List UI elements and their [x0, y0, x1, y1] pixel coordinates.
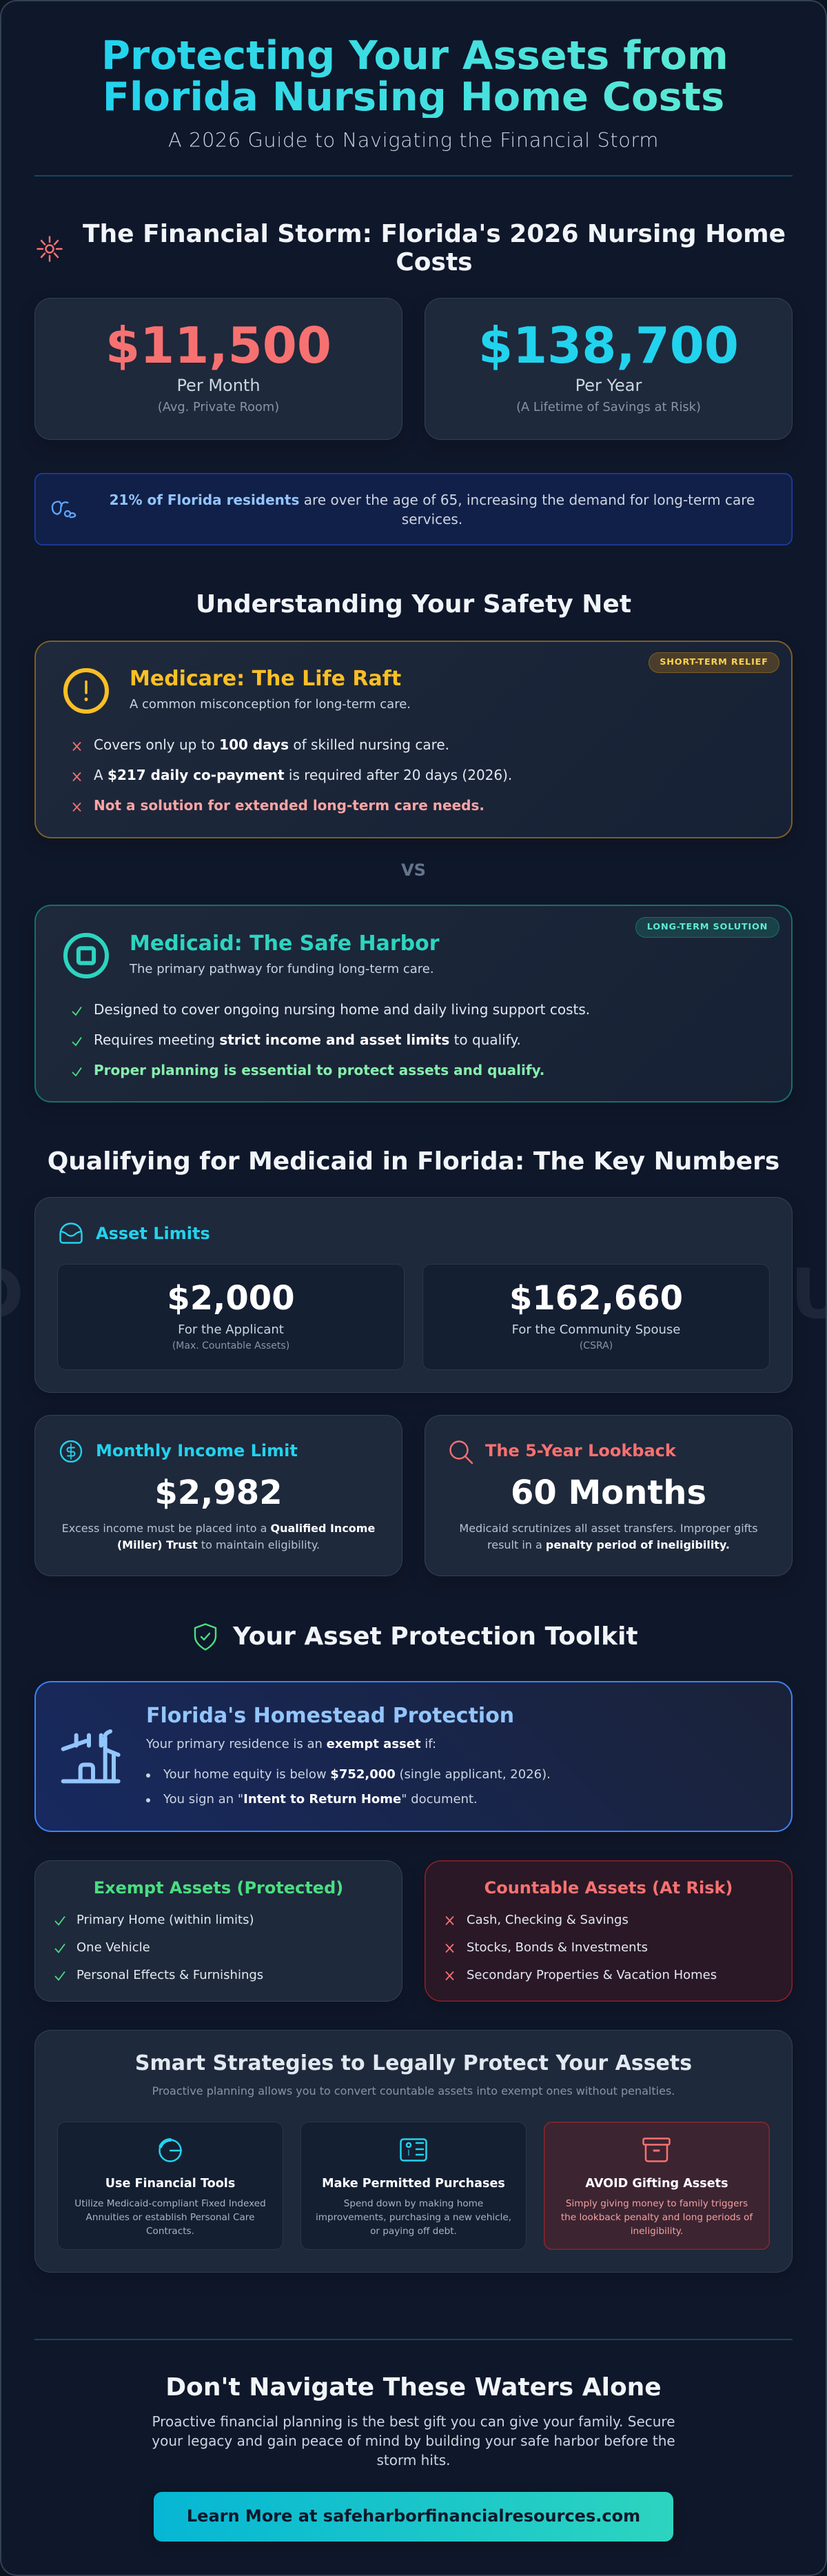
homestead intro: Your primary residence is an exempt asset if:: [146, 1737, 436, 1751]
callout: florida residents: [34, 473, 793, 545]
panel: asset limits: [34, 1197, 793, 1393]
lookback number: 60 Months: [511, 1473, 706, 1512]
icon: homestead: [61, 1729, 121, 1783]
asset limits heading: Asset Limits: [96, 1224, 210, 1243]
medicare subtitle: A common misconception for long-term care.: [130, 697, 411, 712]
list item: Not a solution for extended long-term care needs.: [94, 797, 484, 814]
stat card: per month: (Avg. Private Room): [158, 400, 279, 414]
list item: Personal Effects & Furnishings: [76, 1968, 263, 1982]
icon: magnifier: [449, 1440, 473, 1464]
exempt heading: Exempt Assets (Protected): [94, 1878, 343, 1898]
panel: countable assets: [425, 1860, 793, 2002]
icon: archive: [642, 2137, 671, 2162]
strategy: avoid gifting: the lookback penalty and long periods of: [561, 2212, 753, 2223]
stat card: per month: Per Month: [176, 376, 261, 395]
list item: Proper planning is essential to protect assets and qualify.: [94, 1062, 544, 1078]
heading: understanding your safety net: Understanding Your Safety Net: [196, 590, 631, 618]
panel: medicaid: [34, 905, 793, 1103]
strategy: financial tools: Annuities or establish Personal Care: [86, 2212, 254, 2223]
stat card: per year: [425, 298, 793, 440]
heading: the financial storm: [37, 219, 786, 276]
panel: smart strategies: [34, 2030, 793, 2273]
box: spouse limit: [422, 1264, 770, 1369]
title: Florida Nursing Home Costs: [103, 74, 724, 120]
medicare heading: Medicare: The Life Raft: [130, 667, 401, 691]
strategy: permitted purchases: Make Permitted Purchases: [322, 2177, 505, 2191]
closing paragraph: [152, 2413, 675, 2468]
income number: $2,982: [154, 1473, 283, 1512]
list item: Covers only up to 100 days of skilled nursing care.: [94, 736, 449, 753]
lookback description: result in a penalty period of ineligibility.: [487, 1538, 730, 1551]
heading: asset protection toolkit: Your Asset Protection Toolkit: [233, 1622, 638, 1651]
box: spouse limit: For the Community Spouse: [512, 1322, 680, 1337]
list item: Secondary Properties & Vacation Homes: [467, 1968, 717, 1982]
lookback description: [459, 1521, 758, 1551]
panel: medicare: [34, 641, 793, 838]
stat card: per year: Per Year: [575, 376, 642, 395]
icon: inbox: [59, 1222, 83, 1244]
list item: Primary Home (within limits): [76, 1913, 254, 1927]
strategy: avoid gifting: ineligibility.: [631, 2226, 683, 2237]
background watermark text: [0, 1265, 827, 1324]
closing paragraph: Proactive financial planning is the best gift you can give your family. Secure: [152, 2413, 675, 2430]
strategies heading: Smart Strategies to Legally Protect Your Assets: [135, 2051, 692, 2075]
strategy: permitted purchases: or paying off debt.: [370, 2226, 457, 2237]
list item: Stocks, Bonds & Investments: [467, 1940, 648, 1955]
panel: homestead protection: [34, 1681, 793, 1832]
badge: long-term solution: LONG-TERM SOLUTION: [647, 922, 768, 932]
strategy: financial tools: Contracts.: [146, 2226, 194, 2237]
box: applicant limit: [57, 1264, 405, 1369]
subtitle: A 2026 Guide to Navigating the Financial Storm: [168, 128, 659, 152]
stat card: per year: (A Lifetime of Savings at Risk): [516, 400, 701, 414]
icon: id card: [400, 2138, 427, 2162]
strategy: financial tools: Utilize Medicaid-compliant Fixed Indexed: [74, 2198, 266, 2209]
panel: exempt assets: [34, 1860, 402, 2002]
income description: Excess income must be placed into a Qualified Income: [62, 1521, 375, 1535]
icon: gauge: [159, 2138, 182, 2162]
icon: alert: [63, 668, 109, 714]
box: applicant limit: $2,000: [167, 1279, 295, 1318]
icon: storm sun: [37, 236, 63, 262]
panel: five-year lookback: [425, 1415, 793, 1576]
stat card: per month: $11,500: [105, 316, 331, 374]
list item: One Vehicle: [76, 1940, 150, 1955]
medicaid subtitle: The primary pathway for funding long-term care.: [130, 962, 434, 976]
strategy: permitted purchases: [300, 2122, 527, 2250]
income description: (Miller) Trust to maintain eligibility.: [117, 1538, 320, 1551]
homestead heading: Florida's Homestead Protection: [146, 1704, 514, 1728]
heading: qualifying for medicaid: Qualifying for Medicaid in Florida: The Key Numbers: [48, 1147, 779, 1175]
title: Protecting Your Assets from: [101, 32, 728, 79]
icon: waves: [51, 501, 76, 519]
strategy: financial tools: [57, 2122, 283, 2250]
callout: florida residents: services.: [402, 511, 462, 527]
list item: Requires meeting strict income and asset limits to qualify.: [94, 1032, 521, 1048]
income description: [62, 1521, 375, 1551]
countable heading: Countable Assets (At Risk): [484, 1878, 733, 1898]
lookback heading: The 5-Year Lookback: [485, 1441, 676, 1460]
box: applicant limit: (Max. Countable Assets): [172, 1340, 289, 1351]
closing paragraph: your legacy and gain peace of mind by building your safe harbor before the: [152, 2433, 675, 2449]
callout: florida residents: 21% of Florida residents are over the age of 65, increasing the demand for long-term care: [110, 492, 755, 508]
button: learn more: [154, 2492, 673, 2542]
bullet item: Your home equity is below $752,000 (single applicant, 2026).: [163, 1767, 551, 1782]
bullet item: You sign an "Intent to Return Home" document.: [163, 1792, 478, 1807]
list item: A $217 daily co-payment is required after 20 days (2026).: [94, 767, 512, 783]
strategy: avoid gifting: [544, 2122, 770, 2250]
badge: short-term relief: SHORT-TERM RELIEF: [660, 657, 768, 667]
strategy: permitted purchases: Spend down by making home: [344, 2198, 483, 2209]
box: spouse limit: $162,660: [509, 1279, 683, 1318]
lookback description: Medicaid scrutinizes all asset transfers. Improper gifts: [459, 1521, 758, 1535]
icon: harbor: [63, 933, 109, 978]
panel: monthly income limit: [34, 1415, 402, 1576]
button: learn more: Learn More at safeharborfinancialresources.com: [187, 2506, 640, 2526]
stat card: per month: [34, 298, 402, 440]
list item: Designed to cover ongoing nursing home and daily living support costs.: [94, 1001, 590, 1018]
strategy: financial tools: Use Financial Tools: [105, 2177, 235, 2191]
icon: shield check: [194, 1623, 216, 1651]
vs label: VS: [401, 861, 426, 880]
closing paragraph: storm hits.: [376, 2452, 451, 2468]
heading: the financial storm: The Financial Storm: Florida's 2026 Nursing Home: [83, 219, 786, 248]
stat card: per year: $138,700: [478, 316, 739, 374]
strategy: permitted purchases: improvements, purchasing a new vehicle,: [316, 2212, 511, 2223]
income heading: Monthly Income Limit: [96, 1441, 298, 1460]
icon: dollar: [59, 1440, 83, 1462]
heading: don't navigate alone: Don't Navigate These Waters Alone: [165, 2373, 662, 2401]
title: [101, 35, 726, 118]
strategy: avoid gifting: Simply giving money to family triggers: [566, 2198, 748, 2209]
medicaid heading: Medicaid: The Safe Harbor: [130, 932, 440, 956]
heading: the financial storm: Costs: [396, 248, 473, 276]
badge: short-term relief: [649, 652, 779, 673]
badge: long-term solution: [635, 917, 779, 938]
strategy: avoid gifting: AVOID Gifting Assets: [585, 2177, 728, 2191]
box: spouse limit: (CSRA): [580, 1340, 613, 1351]
strategies subtitle: Proactive planning allows you to convert countable assets into exempt ones without penalties.: [152, 2084, 675, 2097]
list item: Cash, Checking & Savings: [467, 1913, 629, 1927]
box: applicant limit: For the Applicant: [178, 1322, 284, 1337]
